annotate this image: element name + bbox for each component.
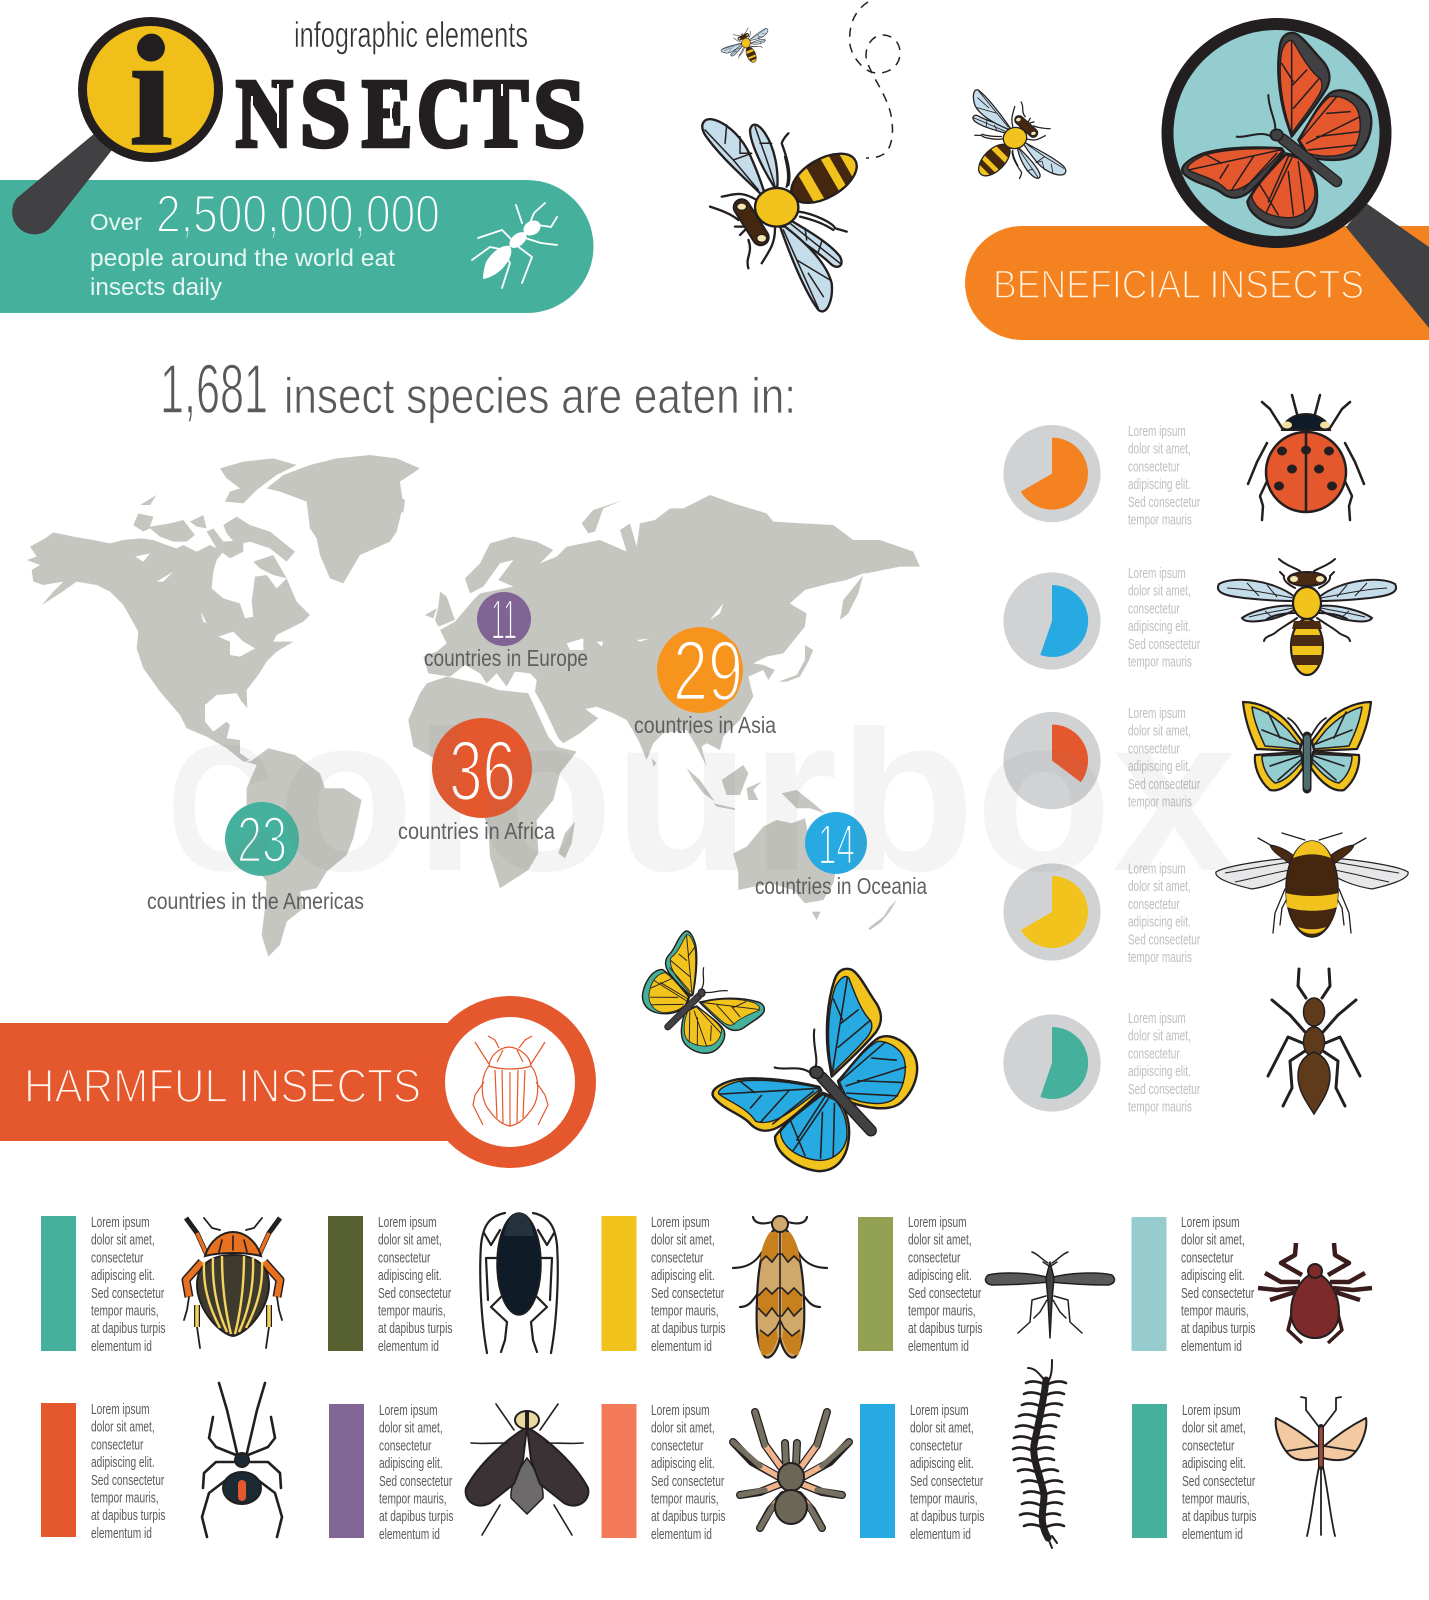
harmful text 3: Lorem ipsum [651, 1214, 710, 1230]
harmful text 7: tempor mauris, [379, 1491, 447, 1507]
harmful text 8: Lorem ipsum [651, 1402, 710, 1418]
title: T [474, 60, 528, 168]
harmful text 1: elementum id [91, 1338, 152, 1354]
color bar 10 [1132, 1404, 1167, 1538]
harmful text 7: Sed consectetur [379, 1473, 452, 1489]
harmful text 5: elementum id [1181, 1338, 1242, 1354]
stat text: Over: Over [90, 209, 142, 235]
heading: species count: 1,681 [160, 350, 268, 428]
harmful text 4: adipiscing elit. [908, 1267, 972, 1284]
icon: bumblebee [1216, 833, 1408, 937]
watermark [174, 725, 1235, 872]
harmful text 5: adipiscing elit. [1181, 1267, 1245, 1284]
harmful text 7: consectetur [379, 1438, 431, 1454]
color bar 1 [41, 1216, 76, 1351]
icon: tarantula [733, 1412, 849, 1528]
harmful text 6: Sed consectetur [91, 1472, 164, 1488]
title: E [362, 59, 412, 167]
magnifier lens [82, 22, 218, 158]
beneficial text 2: adipiscing elit. [1128, 618, 1191, 635]
title: N [236, 60, 293, 168]
beneficial text 3: tempor mauris [1128, 794, 1192, 810]
harmful text 5: tempor mauris, [1181, 1303, 1249, 1319]
subtitle: infographic elements [294, 14, 528, 55]
harmful text 3: consectetur [651, 1250, 703, 1266]
harmful text 6: adipiscing elit. [91, 1454, 155, 1471]
harmful text 2: Sed consectetur [378, 1285, 451, 1301]
harmful text 1: dolor sit amet, [91, 1232, 155, 1248]
icon: honey bee [1218, 559, 1396, 675]
color bar 9 [860, 1404, 895, 1538]
harmful text 10: dolor sit amet, [1182, 1420, 1246, 1436]
map stat: Oceania: countries in Oceania [755, 873, 927, 899]
harmful text 7: adipiscing elit. [379, 1455, 443, 1472]
harmful text 8: Sed consectetur [651, 1473, 724, 1489]
icon: potato beetle [184, 1218, 282, 1348]
icon: mosquito [985, 1252, 1115, 1338]
color bar 8 [602, 1404, 636, 1538]
harmful text 9: Lorem ipsum [910, 1402, 969, 1418]
harmful text 3: tempor mauris, [651, 1303, 719, 1319]
beneficial text 5: tempor mauris [1128, 1099, 1192, 1115]
beneficial text 5: consectetur [1128, 1046, 1180, 1062]
title: C [417, 59, 471, 167]
harmful text 5: at dapibus turpis [1181, 1320, 1255, 1337]
beneficial heading: BENEFICIAL INSECTS [993, 263, 1364, 307]
harmful text 4: elementum id [908, 1338, 969, 1354]
harmful text 10: elementum id [1182, 1526, 1243, 1542]
harmful text 9: consectetur [910, 1438, 962, 1454]
harmful heading: HARMFUL INSECTS [24, 1059, 421, 1112]
harmful text 9: elementum id [910, 1526, 971, 1542]
harmful text 6: tempor mauris, [91, 1490, 159, 1506]
stat text: people: people around the world eat [90, 245, 395, 272]
world map [27, 455, 920, 957]
harmful text 2: at dapibus turpis [378, 1320, 452, 1337]
title: S [300, 60, 350, 168]
map stat: Asia: countries in Asia [634, 712, 776, 738]
map stat: Africa [398, 718, 555, 844]
beneficial text 3: adipiscing elit. [1128, 758, 1191, 775]
harmful text 5: Lorem ipsum [1181, 1214, 1240, 1230]
icon: dark moth [466, 1404, 588, 1535]
harmful text 10: tempor mauris, [1182, 1491, 1250, 1507]
harmful text 9: adipiscing elit. [910, 1455, 974, 1472]
harmful text 1: adipiscing elit. [91, 1267, 155, 1284]
icon: blue butterfly symmetric [1243, 702, 1371, 790]
map stat: Asia [634, 624, 776, 738]
harmful text 2: elementum id [378, 1338, 439, 1354]
map stat: Europe [424, 588, 588, 671]
harmful text 3: elementum id [651, 1338, 712, 1354]
harmful text 9: tempor mauris, [910, 1491, 978, 1507]
harmful text 9: at dapibus turpis [910, 1508, 984, 1525]
dashed flight path [850, 2, 900, 158]
harmful text 10: Sed consectetur [1182, 1473, 1255, 1489]
harmful text 8: adipiscing elit. [651, 1455, 715, 1472]
icon: orange butterfly [1182, 33, 1371, 228]
letter i: i [129, 4, 173, 179]
stat text: people: insects daily [90, 274, 222, 301]
harmful text 8: tempor mauris, [651, 1491, 719, 1507]
icon: tiny bee [720, 23, 768, 66]
map stat: Americas [147, 802, 364, 914]
harmful text 6: Lorem ipsum [91, 1401, 150, 1417]
harmful text 10: consectetur [1182, 1438, 1234, 1454]
beneficial text 5: Lorem ipsum [1128, 1010, 1186, 1026]
harmful text 6: at dapibus turpis [91, 1507, 165, 1524]
map stat: Americas: 23 [237, 803, 287, 876]
pie 4 [1003, 863, 1101, 961]
harmful text 7: at dapibus turpis [379, 1508, 453, 1525]
beneficial text 4: Lorem ipsum [1128, 861, 1186, 877]
pie 1 [1003, 425, 1101, 522]
color bar 5 [1132, 1217, 1166, 1351]
harmful text 9: dolor sit amet, [910, 1420, 974, 1436]
map stat: Africa: 36 [449, 724, 516, 819]
title: S [533, 58, 585, 167]
beneficial text 1: consectetur [1128, 459, 1180, 475]
harmful text 3: at dapibus turpis [651, 1320, 725, 1337]
pie 3 [1003, 712, 1101, 809]
beneficial text 2: Sed consectetur [1128, 636, 1200, 652]
harmful text 5: consectetur [1181, 1250, 1233, 1266]
icon: big bee [702, 119, 866, 311]
harmful text 2: dolor sit amet, [378, 1232, 442, 1248]
heading: species count: insect species are eaten in: [284, 368, 796, 424]
harmful text 7: elementum id [379, 1526, 440, 1542]
harmful text 1: at dapibus turpis [91, 1320, 165, 1337]
harmful text 8: consectetur [651, 1438, 703, 1454]
harmful text 10: adipiscing elit. [1182, 1455, 1246, 1472]
map stat: Europe: countries in Europe [424, 645, 588, 671]
harmful text 6: dolor sit amet, [91, 1419, 155, 1435]
beneficial text 4: adipiscing elit. [1128, 914, 1191, 930]
beneficial text 4: tempor mauris [1128, 949, 1192, 965]
beneficial text 2: consectetur [1128, 601, 1180, 617]
icon: cockroach [480, 1213, 558, 1353]
icon: centipede [1013, 1360, 1066, 1548]
map stat: Americas: countries in the Americas [147, 888, 364, 914]
harmful text 2: adipiscing elit. [378, 1267, 442, 1284]
harmful text 1: Sed consectetur [91, 1285, 164, 1301]
beneficial text 5: dolor sit amet, [1128, 1028, 1191, 1044]
stat number: 2,500,000,000 [156, 185, 440, 244]
beneficial text 1: Sed consectetur [1128, 494, 1200, 510]
harmful text 5: dolor sit amet, [1181, 1232, 1245, 1248]
harmful text 1: consectetur [91, 1250, 143, 1266]
harmful text 1: Lorem ipsum [91, 1214, 150, 1230]
harmful text 4: consectetur [908, 1250, 960, 1266]
watermark: C [167, 708, 275, 909]
harmful text 10: at dapibus turpis [1182, 1508, 1256, 1525]
map stat: Asia: 29 [673, 624, 743, 719]
title [236, 58, 585, 168]
color bar 7 [329, 1404, 364, 1538]
beneficial text 4: Sed consectetur [1128, 931, 1200, 948]
map stat: Oceania: 14 [818, 813, 855, 877]
harmful text 8: at dapibus turpis [651, 1508, 725, 1525]
harmful text 1: tempor mauris, [91, 1303, 159, 1319]
stat banner: teal [0, 180, 594, 313]
harmful text 8: elementum id [651, 1526, 712, 1542]
color bar 2 [328, 1216, 363, 1351]
harmful text 10: Lorem ipsum [1182, 1402, 1241, 1418]
beneficial text 4: dolor sit amet, [1128, 878, 1191, 895]
harmful text 7: dolor sit amet, [379, 1420, 443, 1436]
harmful text 8: dolor sit amet, [651, 1420, 715, 1436]
map stat: Oceania [755, 812, 927, 899]
harmful text 4: tempor mauris, [908, 1303, 976, 1319]
harmful text 2: consectetur [378, 1250, 430, 1266]
harmful text 4: dolor sit amet, [908, 1232, 972, 1248]
icon: yellow butterfly [636, 927, 773, 1060]
beneficial text 5: Sed consectetur [1128, 1081, 1200, 1097]
beneficial text 1: tempor mauris [1128, 512, 1192, 528]
magnifier handle [12, 133, 112, 234]
harmful text 4: Sed consectetur [908, 1285, 981, 1301]
beneficial text 3: Sed consectetur [1128, 776, 1200, 792]
harmful text 2: Lorem ipsum [378, 1214, 437, 1230]
beneficial text 2: tempor mauris [1128, 654, 1192, 670]
magnifier with info i [12, 4, 218, 234]
icon: ladybug [1248, 395, 1364, 520]
beneficial text 3: consectetur [1128, 741, 1180, 757]
heading: species count [160, 350, 796, 428]
pie 2 [1003, 572, 1101, 670]
harmful text 3: adipiscing elit. [651, 1267, 715, 1284]
magnifier lens with butterfly [1168, 24, 1386, 242]
banner: beneficial insects [965, 24, 1429, 340]
icon: tick [1258, 1243, 1372, 1343]
icon: mayfly [1276, 1397, 1366, 1536]
icon: brown ant [1268, 969, 1360, 1114]
harmful text 6: consectetur [91, 1437, 143, 1453]
beneficial text 1: Lorem ipsum [1128, 423, 1186, 439]
beneficial text 2: dolor sit amet, [1128, 583, 1191, 599]
watermark: olourbox [277, 670, 1237, 918]
harmful text 6: elementum id [91, 1525, 152, 1541]
harmful text 3: Sed consectetur [651, 1285, 724, 1301]
color bar 4 [858, 1217, 893, 1351]
beneficial text 3: dolor sit amet, [1128, 723, 1191, 739]
beneficial text 5: adipiscing elit. [1128, 1063, 1191, 1080]
beneficial text 2: Lorem ipsum [1128, 565, 1186, 581]
icon: brown moth [733, 1216, 827, 1357]
harmful text 3: dolor sit amet, [651, 1232, 715, 1248]
beneficial text 1: adipiscing elit. [1128, 476, 1191, 493]
harmful text 4: at dapibus turpis [908, 1320, 982, 1337]
pie 5 [1003, 1014, 1101, 1112]
beneficial text 4: consectetur [1128, 896, 1180, 912]
icon: white ant [472, 203, 557, 288]
color bar 6 [41, 1403, 76, 1537]
harmful text 5: Sed consectetur [1181, 1285, 1254, 1301]
icon: outline beetle [473, 1036, 548, 1126]
harmful text 2: tempor mauris, [378, 1303, 446, 1319]
beneficial text 3: Lorem ipsum [1128, 705, 1186, 721]
color bar 3 [602, 1216, 636, 1351]
map stat: Africa: countries in Africa [398, 818, 555, 844]
beneficial text 1: dolor sit amet, [1128, 441, 1191, 457]
icon: large blue butterfly [703, 951, 931, 1184]
harmful text 4: Lorem ipsum [908, 1214, 967, 1230]
banner: harmful insects [0, 996, 596, 1168]
magnifier handle right [1346, 203, 1429, 328]
harmful text 7: Lorem ipsum [379, 1402, 438, 1418]
icon: black widow [202, 1383, 282, 1537]
map stat: Europe: 11 [491, 588, 517, 652]
harmful text 9: Sed consectetur [910, 1473, 983, 1489]
icon: small bee [953, 73, 1067, 197]
